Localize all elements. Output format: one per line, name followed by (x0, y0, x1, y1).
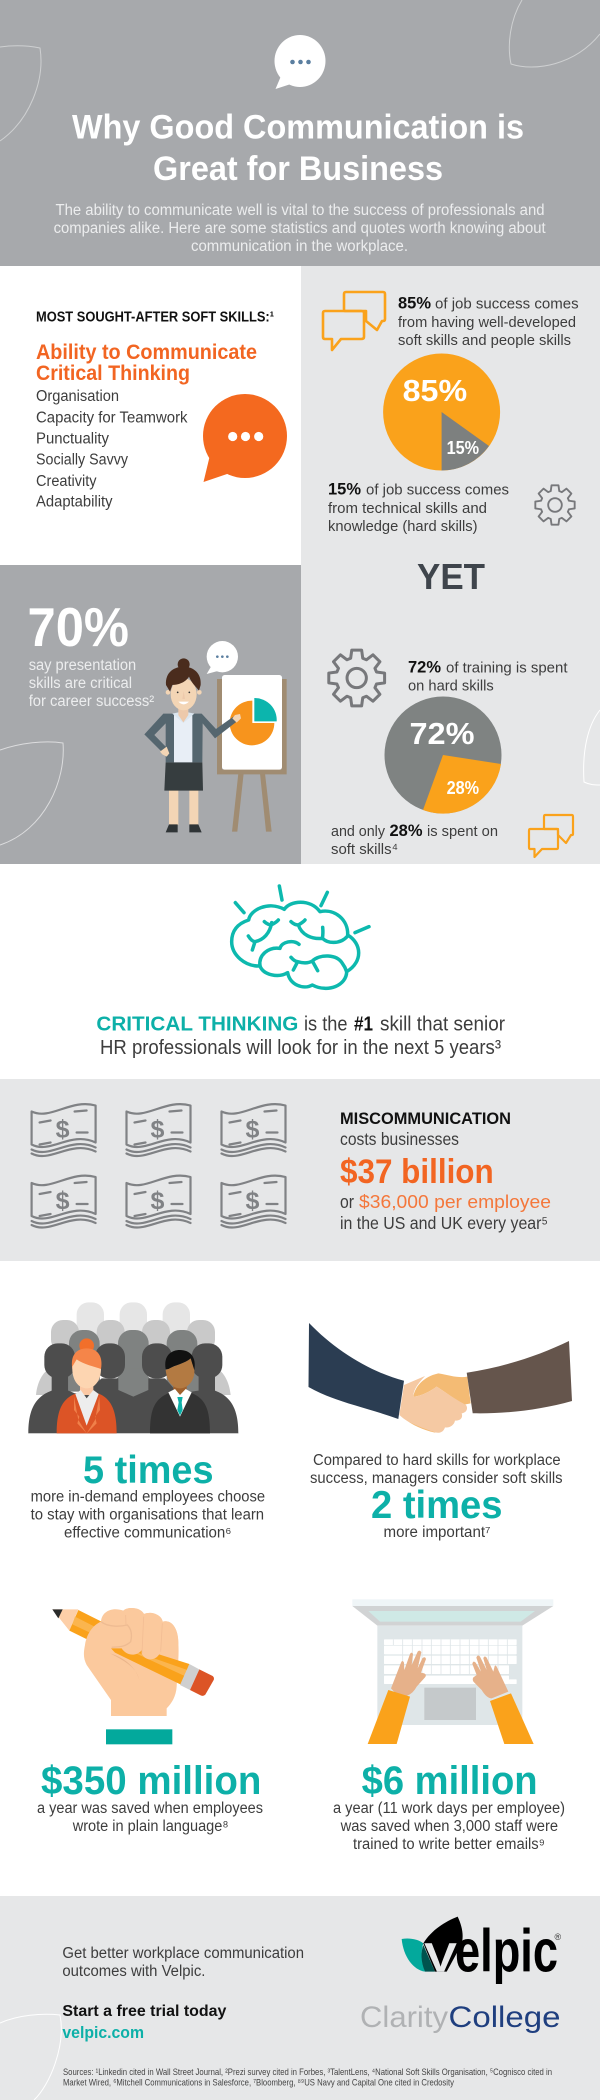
text: miscommunication cost: costs businesses (340, 1129, 459, 1149)
icon: header speech bubble (274, 35, 326, 89)
icon: money bills: $ (150, 1187, 164, 1215)
text: miscommunication cost (340, 1110, 551, 1233)
text: 5 times description (31, 1488, 265, 1542)
text: 85 percent: of job success comes (435, 296, 579, 312)
panel: 5 times (28, 1302, 265, 1542)
stat: 70 percent: 70% (28, 596, 129, 658)
pie chart: 85 and 15: 15% (447, 438, 479, 458)
title: Great for Business (153, 150, 443, 188)
stat: 5 times: 5 times (83, 1449, 214, 1492)
icon: brain (232, 886, 369, 988)
text: presentation skills (29, 657, 154, 710)
icon: money bills (32, 1104, 285, 1228)
text: call to action: Get better workplace communication (62, 1945, 304, 1962)
title (72, 108, 524, 188)
illustration: handshake (308, 1323, 572, 1433)
text: miscommunication cost: in the US and UK every year⁵ (340, 1213, 548, 1233)
text: 15 percent: of job success comes (366, 482, 509, 498)
text: sources: Market Wired, ⁶Mitchell Communications in Salesforce, ⁷Bloomberg, ⁸⁹US Navy and Capital One cited in Credosity (63, 2078, 454, 2088)
logo: Velpic: V (424, 1934, 458, 1980)
text: 6 million description: trained to write better emails⁹ (353, 1836, 545, 1853)
skills list (36, 388, 188, 510)
text: 28 percent: and only (331, 823, 385, 840)
text: 85 percent (398, 294, 579, 349)
title: Why Good Communication is (72, 108, 524, 146)
text: call to action: Start a free trial today (62, 2003, 227, 2020)
text: 15 percent: 15% (328, 480, 361, 498)
intro text (54, 202, 546, 255)
highlighted skills: Critical Thinking (36, 362, 190, 385)
pie chart: 72 and 28: 28% (447, 778, 479, 798)
text: critical thinking statement: is the (304, 1014, 348, 1036)
text: call to action: outcomes with Velpic. (62, 1963, 205, 1980)
intro text: The ability to communicate well is vital to the success of professionals and (56, 202, 544, 219)
text: 28 percent: soft skills⁴ (331, 841, 398, 858)
panel: header (0, 0, 600, 266)
logo: Clarity College: Clarity (360, 2001, 448, 2034)
icon: small gear (535, 485, 575, 525)
text: 5 times description: more in-demand employees choose (31, 1488, 265, 1506)
logo: Clarity College: College (448, 2001, 560, 2034)
icon: money bills: $ (150, 1116, 164, 1144)
panel: footer (0, 1896, 600, 2100)
text: 6 million description: was saved when 3,000 staff were (340, 1818, 558, 1835)
text: 350 million description (37, 1800, 263, 1835)
panel: miscommunication (0, 1079, 600, 1261)
pie chart: 72 and 28: 72% (410, 716, 474, 751)
text: presentation skills: for career success² (29, 693, 154, 710)
pie chart: 85 and 15: 85% (403, 373, 467, 408)
text: 72 percent (408, 658, 568, 694)
text: critical thinking statement: CRITICAL THINKING (96, 1014, 298, 1036)
text: compared to hard skills (310, 1452, 563, 1487)
text: call to action (62, 1945, 304, 2042)
intro text: companies alike. Here are some statistics and quotes worth knowing about (54, 220, 546, 237)
text: sources (63, 2067, 552, 2088)
text: miscommunication cost: $37 billion (340, 1153, 494, 1191)
icon: large gear (329, 650, 385, 706)
icon: money bills: $ (246, 1187, 260, 1215)
text: 5 times description: effective communication⁶ (64, 1524, 232, 1542)
text: 6 million description (333, 1800, 565, 1853)
illustration: hand holding pencil (52, 1608, 214, 1744)
panel: soft skills list (0, 266, 301, 565)
text: critical thinking statement: #1 (354, 1014, 373, 1036)
text: critical thinking statement: HR professionals will look for in the next 5 years³ (100, 1037, 501, 1059)
text: 15 percent: from technical skills and (328, 500, 487, 517)
skills list: Creativity (36, 473, 97, 490)
text: miscommunication cost: MISCOMMUNICATION (340, 1110, 511, 1128)
heading: most sought-after soft skills: MOST SOUGHT-AFTER SOFT SKILLS:¹ (36, 310, 274, 326)
text: 350 million description: wrote in plain language⁸ (72, 1818, 229, 1835)
text: 85 percent: from having well-developed (398, 314, 576, 331)
text: 72 percent: 72% (408, 658, 441, 676)
panel: 2 times (308, 1323, 572, 1541)
text: critical thinking statement: skill that senior (380, 1014, 505, 1036)
text: 85 percent: 85% (398, 294, 431, 312)
pie chart: 85 and 15 (383, 354, 500, 470)
intro text: communication in the workplace. (191, 238, 408, 255)
icon: money bills: $ (246, 1116, 260, 1144)
illustration: presenter at easel (144, 641, 287, 832)
text: call to action: velpic.com (62, 2023, 144, 2042)
text: critical thinking statement (96, 1014, 505, 1059)
text: compared to hard skills: Compared to hard skills for workplace (313, 1452, 561, 1469)
text: 28 percent (331, 821, 498, 858)
text: 28 percent: is spent on (427, 823, 498, 840)
text: 72 percent: of training is spent (446, 660, 568, 676)
stat: 6 million: $6 million (362, 1759, 538, 1803)
skills list: Organisation (36, 388, 119, 405)
logo: Velpic (402, 1917, 562, 1984)
text: 72 percent: on hard skills (408, 678, 494, 694)
heading: yet: YET (417, 556, 485, 597)
illustration: laptop and typing hands (352, 1599, 553, 1744)
icon: money bills: $ (56, 1187, 70, 1215)
icon: orange speech bubble (203, 394, 287, 482)
text: 350 million description: a year was saved when employees (37, 1800, 263, 1817)
text: 5 times description: to stay with organisations that learn (31, 1506, 264, 1524)
highlighted skills (36, 341, 257, 385)
skills list: Punctuality (36, 430, 109, 448)
stat: 350 million: $350 million (41, 1759, 261, 1803)
text: 15 percent (328, 480, 509, 535)
text: 6 million description: a year (11 work days per employee) (333, 1800, 565, 1817)
text: miscommunication cost: $36,000 per employee (359, 1191, 551, 1212)
icon: small chat bubbles outline (529, 815, 573, 857)
skills list: Socially Savvy (36, 452, 128, 468)
illustration: crowd of employees (28, 1302, 238, 1433)
pie chart: 72 and 28 (384, 696, 502, 814)
text: 85 percent: soft skills and people skills (398, 332, 571, 349)
icon: chat bubbles outline (323, 292, 385, 350)
text: presentation skills: skills are critical (29, 675, 132, 692)
stat: 2 times: 2 times (371, 1484, 502, 1527)
skills list: Adaptability (36, 494, 113, 510)
logo: Velpic: ® (554, 1932, 562, 1942)
text: compared to hard skills: success, managers consider soft skills (310, 1470, 563, 1487)
logo: Velpic: elpic (455, 1918, 558, 1984)
skills list: Capacity for Teamwork (36, 410, 188, 426)
icon: money bills: $ (56, 1116, 70, 1144)
panel: 70 percent presentation skills (0, 565, 301, 864)
panel: job success and training (301, 266, 600, 864)
text: presentation skills: say presentation (29, 657, 136, 674)
text: 15 percent: knowledge (hard skills) (328, 518, 478, 535)
panel: 6 million (333, 1599, 565, 1853)
panel: critical thinking (0, 864, 600, 1079)
highlighted skills: Ability to Communicate (36, 341, 257, 364)
text: miscommunication cost: or (340, 1191, 354, 1212)
panel: 350 million (37, 1608, 263, 1835)
text: more important: more important⁷ (384, 1524, 490, 1541)
text: 28 percent: 28% (390, 821, 422, 840)
